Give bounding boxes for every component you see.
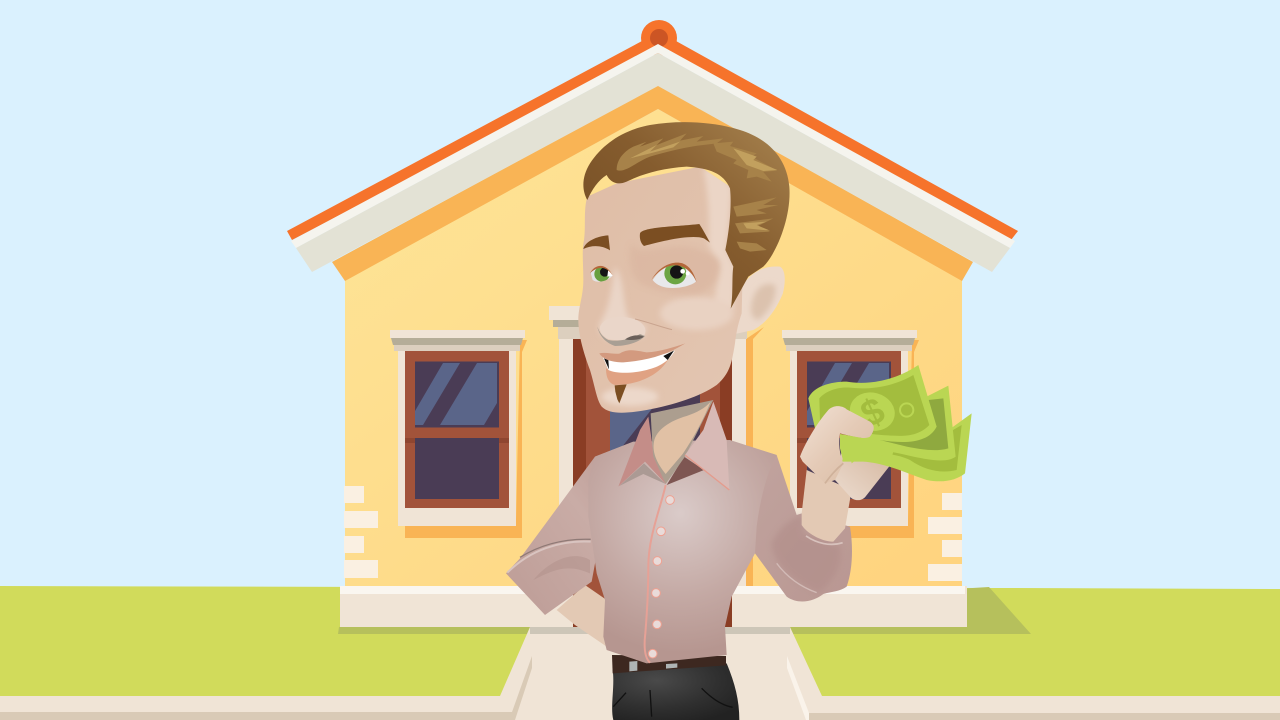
lower lip [606,355,670,385]
eye socket shade [636,250,720,292]
neck [651,400,713,484]
front door [549,306,764,627]
left wall bricks [344,486,378,578]
fist and thumb [800,406,895,483]
right eye [652,262,696,288]
left window [390,330,527,538]
roof finial [641,20,677,56]
hair highlights [617,133,778,252]
right forearm [802,470,852,544]
knuckle crease [825,463,843,483]
right sleeve [727,440,852,602]
cheek highlight [660,297,733,330]
left eyebrow [583,235,610,250]
right eyebrow [640,224,710,246]
face [578,167,743,413]
back bill [842,413,972,481]
mouth corners [604,351,674,369]
shirt buttons [648,496,674,658]
nose bridge highlight [599,267,647,340]
front bill [808,365,937,442]
house [287,20,1031,634]
forehead highlight [703,168,735,310]
head [578,122,790,413]
wall [345,109,962,590]
front walkway [0,627,1280,720]
dollar sign: $ [854,388,891,435]
shirt [506,400,852,663]
right collar [685,402,729,490]
roof top orange edge [287,41,1018,240]
roof white trim [291,44,1015,248]
middle bill [847,386,956,461]
trousers and belt [612,655,739,720]
lower fingers [835,452,892,500]
goatee [615,384,627,403]
money gripped in fist [840,434,895,463]
man with cash [506,122,972,720]
cash stack [808,365,972,481]
roof fascia [296,53,1010,272]
right window [782,330,919,538]
soft face shading [599,168,735,406]
nose tip [600,317,645,340]
foundation [338,586,1031,634]
nostril [625,335,644,340]
button placket [645,485,666,663]
left eye [590,266,612,282]
grass lawn [0,586,1280,700]
roof underside shadow [332,85,973,281]
torso [588,440,777,663]
chin highlight [602,387,658,406]
mouth and teeth [603,351,675,373]
left sleeve [506,442,633,615]
left forearm on hip [557,585,607,647]
bright hair streaks [630,142,777,231]
nose shadow [597,327,645,346]
ear [735,266,785,334]
upper lip [599,343,685,362]
collar shadows [619,457,704,486]
smile line [635,319,672,330]
hair [583,122,790,309]
left collar [618,417,666,487]
right wall bricks [928,493,962,581]
